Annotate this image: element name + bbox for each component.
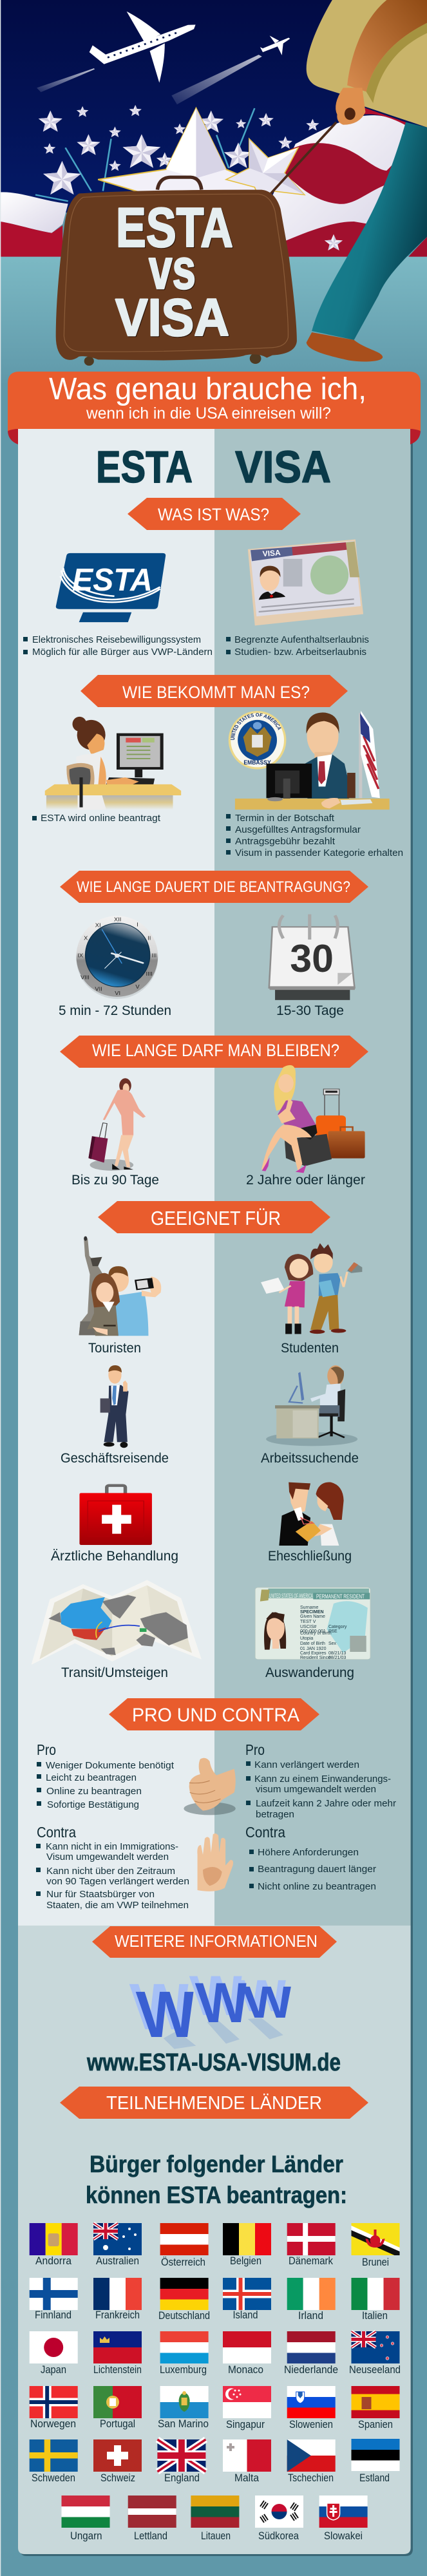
flag: Portugal: Portugal	[100, 2418, 135, 2430]
list: visa cons: Nicht online zu beantragen	[258, 1881, 376, 1892]
flag: Malta	[223, 2439, 271, 2484]
list: ESTA pros: Weniger Dokumente benötigt	[46, 1760, 175, 1771]
list: ESTA definition: Elektronisches Reisebewilligungssystem	[32, 634, 201, 645]
flag: Neuseeland: Neuseeland	[349, 2364, 401, 2376]
flag: Brunei: Brunei	[362, 2257, 389, 2268]
illustration: embassy officer	[228, 711, 390, 810]
intro line 2: können ESTA beantragen:	[86, 2182, 347, 2208]
illustration: businessman	[100, 1365, 129, 1448]
clock numerals	[77, 916, 157, 996]
flag: Österreich: Österreich	[161, 2257, 205, 2268]
card text: 08/21/13	[328, 1651, 346, 1656]
card text: Category	[328, 1625, 347, 1629]
label: Studenten: Studenten	[281, 1341, 339, 1356]
label: Transit/Umsteigen: Transit/Umsteigen	[61, 1665, 168, 1680]
flag: Norwegen	[30, 2386, 78, 2430]
heading: TEILNEHMENDE LÄNDER	[60, 2087, 368, 2119]
flag: Deutschland: Deutschland	[158, 2310, 210, 2322]
clock numerals: X	[84, 935, 88, 941]
flag: Andorra: Andorra	[35, 2255, 72, 2267]
flag: Andorra	[30, 2223, 78, 2267]
list: visa pros	[245, 1741, 396, 1820]
flag: San Marino	[158, 2386, 209, 2430]
WWW face: W	[241, 1976, 296, 2027]
list: visa pros: Laufzeit kann 2 Jahre oder mehr	[256, 1798, 396, 1809]
flag: Australien: Australien	[96, 2255, 139, 2267]
label: Geschäftsreisende: Geschäftsreisende	[61, 1451, 169, 1466]
clock numerals: III	[151, 952, 157, 958]
hand	[336, 88, 365, 125]
arm	[347, 0, 427, 91]
flag: Lichtenstein: Lichtenstein	[93, 2364, 142, 2376]
WWW extrusion: W	[236, 1970, 290, 2021]
list: how to get visa	[226, 813, 403, 858]
card text: Date of Birth	[300, 1642, 325, 1646]
right column	[214, 429, 411, 1926]
list: ESTA cons: von 90 Tagen verlängert werden	[46, 1876, 189, 1887]
shoe	[307, 332, 383, 361]
flag: England	[157, 2439, 205, 2484]
pull handle	[270, 122, 336, 194]
left column	[18, 429, 214, 1926]
plane: large	[90, 12, 196, 83]
flag: Niederlande: Niederlande	[284, 2364, 338, 2376]
flag: Österreich	[160, 2223, 209, 2268]
suitcase handle	[157, 177, 202, 190]
flag: Tschechien: Tschechien	[288, 2472, 334, 2484]
flag: Neuseeland	[349, 2331, 401, 2376]
flag: Australien	[93, 2223, 142, 2267]
flag: Estland	[352, 2439, 399, 2484]
label: Arbeitssuchende: Arbeitssuchende	[261, 1451, 359, 1466]
girl	[261, 1254, 313, 1334]
illustration: folded world map	[32, 1580, 202, 1665]
panel: footer	[18, 1926, 411, 2554]
flag: Ungarn: Ungarn	[70, 2530, 102, 2542]
WWW extrusion: W	[128, 1969, 195, 2043]
flag: Litauen: Litauen	[201, 2530, 231, 2542]
icon: ESTA logo monitor: ESTA	[72, 563, 153, 598]
icon: calendar	[269, 914, 355, 1000]
flag on pole	[359, 711, 380, 798]
clock numerals: IIII	[146, 971, 153, 977]
flag: left side	[0, 192, 68, 257]
clock numerals: I	[137, 922, 138, 927]
flag: Deutschland	[158, 2278, 210, 2322]
light rays	[35, 108, 254, 201]
panel shadow	[20, 429, 413, 2556]
flag: Japan: Japan	[41, 2364, 66, 2376]
flag: Estland: Estland	[359, 2472, 390, 2484]
title: VISA: VISA	[115, 289, 229, 347]
flag: Slowenien	[287, 2386, 336, 2430]
list: visa definition: Begrenzte Aufenthaltserlaubnis	[234, 634, 369, 645]
heading: WIE BEKOMMT MAN ES?	[81, 675, 348, 707]
title: vs: vs	[149, 237, 196, 301]
icon: visa document: VISA	[262, 548, 281, 558]
card text	[269, 1593, 365, 1660]
suit	[302, 754, 351, 799]
flag: Frankreich: Frankreich	[95, 2309, 140, 2321]
flag: Portugal	[93, 2386, 142, 2430]
list: how to get visa: Ausgefülltes Antragsformular	[235, 824, 361, 835]
column heading: VISA: VISA	[235, 442, 331, 492]
list: visa cons: Höhere Anforderungen	[258, 1847, 359, 1858]
label: visa stay: 2 Jahre oder länger	[246, 1173, 365, 1188]
flag: Lichtenstein	[93, 2331, 142, 2376]
list: ESTA cons: Kann nicht in ein Immigrations-	[46, 1841, 178, 1852]
WWW extrusion: W	[188, 1964, 248, 2027]
heading: GEEIGNET FÜR: GEEIGNET FÜR	[151, 1207, 281, 1229]
flag: Irland: Irland	[298, 2310, 323, 2322]
icon: thumbs up	[184, 1758, 236, 1815]
website address: www.ESTA-USA-VISUM.de	[86, 2049, 341, 2076]
list: ESTA cons: Kann nicht über den Zeitraum	[46, 1866, 175, 1877]
flag: Island: Island	[233, 2309, 258, 2321]
clock numerals: VI	[115, 990, 120, 996]
icon: calendar: 30	[290, 936, 334, 980]
label: ESTA duration: 5 min - 72 Stunden	[59, 1003, 171, 1018]
flag: Lettland: Lettland	[134, 2530, 167, 2542]
flag: Belgien	[223, 2223, 271, 2267]
icon: 3D WWW	[128, 1964, 296, 2051]
sky	[1, 0, 427, 213]
heading: WIE BEKOMMT MAN ES?: WIE BEKOMMT MAN ES?	[122, 683, 310, 702]
banner: main question	[8, 372, 421, 444]
card text: 000-000-001	[300, 1629, 326, 1634]
subheading: Contra: Contra	[245, 1824, 285, 1841]
flag: Island	[223, 2278, 271, 2321]
illustration: woman on luggage	[261, 1065, 365, 1173]
illustration: tourists selfie	[79, 1236, 161, 1336]
heading: PRO UND CONTRA	[109, 1698, 319, 1730]
clock numerals: IX	[77, 952, 83, 958]
card text: PERMANENT RESIDENT	[316, 1593, 365, 1600]
list: ESTA definition	[23, 634, 213, 658]
WWW face	[134, 1971, 296, 2051]
clock numerals: II	[147, 935, 151, 941]
flag: Dänemark: Dänemark	[289, 2255, 334, 2267]
flag: Malta: Malta	[234, 2472, 260, 2484]
flag: Slowenien: Slowenien	[289, 2419, 333, 2430]
list: visa definition	[226, 634, 369, 658]
flag: Japan	[30, 2331, 78, 2376]
icon: visa document	[248, 539, 363, 625]
heading: WAS IST WAS?	[128, 498, 301, 530]
card text: USCIS#	[300, 1625, 316, 1629]
flag: San Marino: San Marino	[158, 2418, 209, 2430]
list: how to get visa: Termin in der Botschaft	[235, 813, 335, 824]
card text: TEST V	[300, 1620, 316, 1624]
embassy seal: UNITED STATES OF AMERICA	[231, 713, 281, 740]
flag: Schweden: Schweden	[32, 2472, 75, 2484]
label: Touristen: Touristen	[88, 1341, 141, 1356]
flag: Italien: Italien	[362, 2310, 388, 2322]
card text: Given Name	[300, 1615, 325, 1619]
subheading: Contra: Contra	[37, 1824, 76, 1841]
flag: Irland	[287, 2278, 336, 2322]
label: Ärztliche Behandlung: Ärztliche Behandlung	[51, 1549, 178, 1564]
flag: Südkorea: Südkorea	[258, 2530, 299, 2542]
list: ESTA cons: Visum umgewandelt werden	[46, 1852, 169, 1862]
heading: WIE LANGE DAUERT DIE BEANTRAGUNG?	[60, 871, 368, 903]
flag: right side	[272, 107, 427, 257]
illustration: students	[261, 1243, 362, 1334]
heading: WEITERE INFORMATIONEN	[92, 1926, 337, 1958]
list: visa cons	[245, 1824, 376, 1892]
left edge line	[0, 0, 1, 2576]
heading: WAS IST WAS?: WAS IST WAS?	[158, 505, 269, 524]
monitor	[267, 764, 312, 804]
card text: Utopia	[300, 1636, 313, 1641]
woman	[87, 1273, 120, 1336]
flag: Schweden	[30, 2439, 78, 2484]
list: ESTA pros: Sofortige Bestätigung	[47, 1799, 139, 1810]
flag: Ungarn	[62, 2496, 109, 2542]
list: ESTA definition: Möglich für alle Bürger aus VWP-Ländern	[32, 647, 213, 658]
clock numerals: V	[135, 984, 140, 990]
illustration: permanent resident card	[255, 1587, 370, 1660]
list: ESTA pros: Online zu beantragen	[46, 1786, 142, 1797]
illustration: couple with gift	[279, 1482, 344, 1546]
flag: Frankreich	[93, 2278, 142, 2321]
list: visa pros: Kann verlängert werden	[254, 1759, 359, 1770]
embassy seal	[228, 711, 286, 770]
banner shape	[8, 372, 421, 431]
pants	[312, 122, 427, 340]
intro line 1: Bürger folgender Länder	[90, 2151, 343, 2177]
card text: Country of Birth	[300, 1631, 332, 1636]
flag: Belgien: Belgien	[230, 2255, 261, 2267]
label: visa duration: 15-30 Tage	[276, 1003, 344, 1018]
statue of liberty	[79, 1236, 103, 1335]
header illustration: night sky, flag, stars, planes and traveller	[0, 0, 427, 385]
list: ESTA pros: Leicht zu beantragen	[46, 1772, 137, 1783]
subheading: Pro: Pro	[245, 1741, 265, 1758]
flag: Finnland: Finnland	[35, 2309, 71, 2321]
icon: ESTA logo monitor	[56, 553, 166, 622]
wheels	[84, 350, 261, 366]
flag: Spanien	[352, 2386, 399, 2430]
illustration: woman at computer	[45, 717, 181, 810]
card text: Sex	[328, 1642, 337, 1646]
label: ESTA stay: Bis zu 90 Tage	[71, 1173, 159, 1188]
plane: small	[260, 35, 290, 55]
icon: open palm	[197, 1833, 233, 1891]
column heading: ESTA: ESTA	[96, 442, 193, 492]
list: how to get visa: Antragsgebühr bezahlt	[235, 836, 336, 847]
boy	[310, 1243, 362, 1334]
clock numerals: XI	[95, 922, 101, 928]
card text: R6E	[328, 1629, 337, 1634]
clock numerals: VIII	[81, 974, 90, 981]
heading: PRO UND CONTRA: PRO UND CONTRA	[132, 1705, 299, 1726]
list: visa pros: betragen	[256, 1809, 294, 1820]
flag waves, stars, planes (drawn in zoom space)	[0, 0, 427, 366]
flag: Tschechien	[287, 2439, 336, 2484]
flag: Finnland	[30, 2278, 78, 2321]
map landmasses	[48, 1595, 188, 1655]
panel: comparison	[18, 429, 411, 1926]
card text: Card Expires	[300, 1651, 327, 1656]
WWW face: W	[194, 1971, 252, 2034]
flag: Singapur: Singapur	[226, 2419, 265, 2430]
flag: Spanien: Spanien	[358, 2419, 393, 2430]
flag: Norwegen: Norwegen	[30, 2418, 76, 2430]
icon: clock	[76, 916, 158, 999]
banner line 2: wenn ich in die USA einreisen will?	[86, 404, 331, 422]
flag: Schweiz: Schweiz	[100, 2472, 135, 2484]
label: Eheschließung: Eheschließung	[268, 1549, 352, 1564]
flag: Luxemburg	[160, 2331, 209, 2376]
flag: Dänemark	[287, 2223, 336, 2267]
flag: Südkorea	[255, 2496, 303, 2542]
heading: GEEIGNET FÜR	[98, 1201, 330, 1233]
embassy seal: EMBASSY	[243, 759, 271, 766]
list: visa pros: visum umgewandelt werden	[256, 1784, 376, 1795]
flag: Monaco: Monaco	[228, 2364, 263, 2376]
flag: Brunei	[352, 2223, 399, 2268]
list: visa cons: Beantragung dauert länger	[258, 1864, 376, 1875]
list: ESTA cons: Nur für Staatsbürger von	[46, 1889, 155, 1900]
card text: 01 JAN 1920	[300, 1647, 327, 1651]
flag: Slowakei: Slowakei	[324, 2530, 363, 2542]
card text: UNITED STATES OF AMERICA	[269, 1593, 313, 1599]
list: how to get ESTA: ESTA wird online beantragt	[41, 813, 161, 824]
heading: WIE LANGE DARF MAN BLEIBEN?: WIE LANGE DARF MAN BLEIBEN?	[92, 1041, 339, 1060]
list: ESTA cons: Staaten, die am VWP teilnehmen	[46, 1900, 189, 1911]
contrails	[37, 55, 262, 104]
hand and papers	[267, 797, 372, 808]
illustration: woman with trolley	[88, 1078, 146, 1171]
clock numerals: VII	[95, 986, 102, 992]
man	[108, 1266, 161, 1336]
subheading: Pro: Pro	[37, 1741, 56, 1758]
WWW extrusion	[128, 1964, 290, 2043]
list: visa pros: Kann zu einem Einwanderungs-	[254, 1774, 391, 1785]
suitcase stitching	[64, 194, 288, 352]
desk	[235, 799, 390, 810]
flag: England: England	[164, 2472, 200, 2484]
title: ESTA: ESTA	[116, 197, 233, 259]
coat shadow	[366, 23, 427, 103]
clock hands	[102, 930, 143, 969]
list: ESTA cons	[36, 1824, 189, 1911]
WWW shadow fade	[164, 2018, 283, 2049]
label: Auswanderung: Auswanderung	[265, 1665, 354, 1680]
flag: Luxemburg: Luxemburg	[160, 2364, 207, 2376]
flag: Italien	[352, 2278, 399, 2322]
flag: Niederlande	[284, 2331, 338, 2376]
card text: SPECIMEN	[300, 1610, 324, 1615]
icon: first aid case	[79, 1486, 152, 1545]
list: how to get visa: Visum in passender Kategorie erhalten	[235, 848, 403, 858]
stars group	[39, 105, 343, 251]
big gold-outlined star	[98, 108, 272, 201]
clock numerals: XII	[114, 916, 121, 923]
banner line 1: Was genau brauche ich,	[49, 372, 366, 406]
coat	[307, 0, 427, 128]
flag: Lettland	[128, 2496, 176, 2542]
heading: TEILNEHMENDE LÄNDER: TEILNEHMENDE LÄNDER	[106, 2093, 322, 2114]
suitcase body	[56, 190, 297, 361]
heading: WIE LANGE DARF MAN BLEIBEN?	[60, 1036, 368, 1068]
head	[307, 712, 339, 761]
WWW face: W	[134, 1977, 200, 2051]
ground	[1, 256, 427, 385]
flag: Monaco	[223, 2331, 271, 2376]
flag: Singapur	[223, 2386, 271, 2430]
list: visa definition: Studien- bzw. Arbeitserlaubnis	[234, 647, 366, 658]
ribbon curls	[8, 428, 421, 444]
second big star	[226, 138, 305, 204]
flag: Litauen	[191, 2496, 239, 2542]
heading: WIE LANGE DAUERT DIE BEANTRAGUNG?: WIE LANGE DAUERT DIE BEANTRAGUNG?	[77, 878, 350, 896]
heading: WEITERE INFORMATIONEN: WEITERE INFORMATIONEN	[115, 1931, 318, 1951]
flag: Schweiz	[93, 2439, 142, 2484]
card text: Surname	[300, 1605, 319, 1610]
list: ESTA pros	[37, 1741, 175, 1810]
flag: Slowakei	[319, 2496, 368, 2542]
card text: Resident Since	[300, 1656, 330, 1660]
card text: 08/21/03	[328, 1656, 346, 1660]
illustration: job seeker at desk	[266, 1365, 357, 1446]
